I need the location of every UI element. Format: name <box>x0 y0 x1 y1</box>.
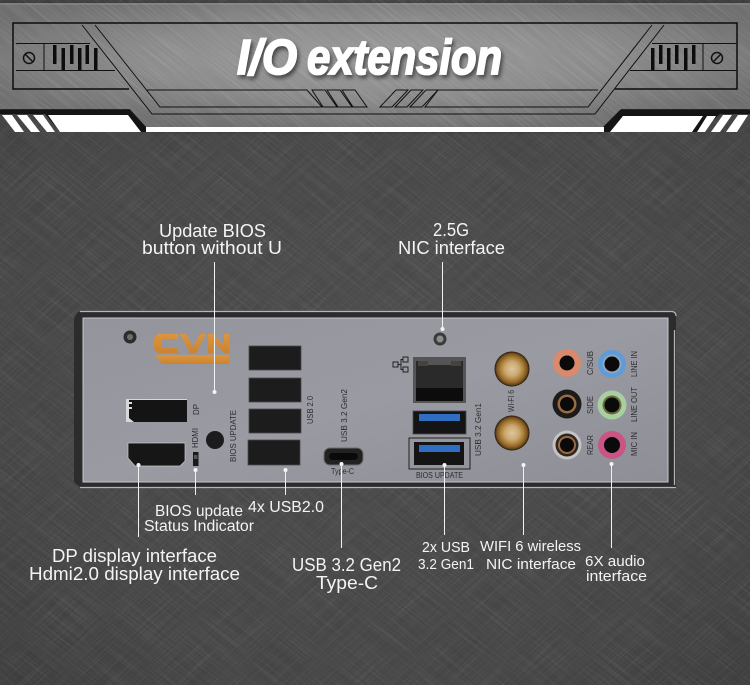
USB 3.2 ports: BIOS UPDATE <box>416 471 463 480</box>
leader lines <box>136 262 614 548</box>
label: 2.5G NIC <box>398 219 505 258</box>
engraved frame lines <box>13 23 737 114</box>
label: BIOS update status indicator: BIOS update <box>155 503 243 520</box>
label: 4x USB2.0: 4x USB2.0 <box>248 499 324 516</box>
Wi-Fi antenna connectors: WI-FI 6 <box>507 390 516 412</box>
label: update BIOS button: Update BIOS <box>159 220 266 241</box>
audio labels: LINE OUT <box>630 387 639 422</box>
header banner <box>0 3 750 132</box>
metal plate <box>0 3 750 127</box>
shield plate <box>83 318 668 482</box>
right comb widget <box>630 43 737 70</box>
label: display interfaces: DP display interface <box>52 545 217 566</box>
audio labels: C/SUB <box>586 351 595 375</box>
audio labels: LINE IN <box>630 351 639 377</box>
DP port: DP <box>192 404 201 415</box>
BIOS update button <box>206 410 238 462</box>
USB 3.2 ports: USB 3.2 Gen1 <box>474 402 483 456</box>
label: 6X audio: interface <box>586 568 647 585</box>
DP port <box>126 399 201 422</box>
left comb widget <box>16 43 115 70</box>
label: 2x USB 3.2 Gen1: 2x USB <box>422 539 470 556</box>
audio jacks <box>552 349 626 460</box>
label: update BIOS button <box>142 220 282 258</box>
USB-C port: USB 3.2 Gen2 <box>340 388 349 442</box>
white centre strip <box>146 127 604 132</box>
label: USB 3.2 Gen2 Type-C: Type-C <box>316 573 378 593</box>
network icon <box>393 357 408 372</box>
audio labels: SIDE <box>586 396 595 414</box>
white stripes right <box>610 115 748 132</box>
label: 6X audio <box>585 553 647 585</box>
label: BIOS update status indicator <box>144 503 254 535</box>
title: I/O <box>237 31 297 85</box>
title <box>237 31 502 85</box>
label: WIFI 6: NIC interface <box>486 556 576 573</box>
black band right <box>603 110 750 132</box>
CVN logo <box>154 334 229 364</box>
black band left <box>0 110 146 132</box>
label: USB 3.2 Gen2 Type-C <box>292 555 401 593</box>
label: 2x USB 3.2 Gen1: 3.2 Gen1 <box>418 556 474 573</box>
USB-C port: Type-C <box>331 467 354 476</box>
label: display interfaces <box>29 545 240 584</box>
I/O shield panel <box>74 312 676 488</box>
BIOS status LED <box>193 452 198 466</box>
label: update BIOS button: button without U <box>142 237 282 258</box>
audio labels: MIC IN <box>630 432 639 456</box>
label: 2.5G NIC: NIC interface <box>398 237 505 258</box>
USB 2.0 stack: USB 2.0 <box>306 395 315 424</box>
HDMI port <box>128 428 200 466</box>
title: extension <box>307 31 502 85</box>
audio labels <box>586 351 639 456</box>
RJ45 port <box>413 357 466 403</box>
label: USB 3.2 Gen2 Type-C: USB 3.2 Gen2 <box>292 555 401 575</box>
label: 2x USB 3.2 Gen1 <box>418 539 474 573</box>
label: 2.5G NIC: 2.5G <box>433 219 469 240</box>
white stripes left <box>2 115 141 132</box>
label: 6X audio: 6X audio <box>585 553 645 570</box>
USB-C port <box>324 388 363 476</box>
screws <box>124 330 446 346</box>
BIOS update button: BIOS UPDATE <box>229 410 238 462</box>
HDMI port: HDMI <box>191 428 200 448</box>
label: display interfaces: Hdmi2.0 display interface <box>29 563 240 584</box>
shield frame <box>74 312 676 487</box>
USB 2.0 stack <box>248 346 315 465</box>
label: BIOS update status indicator: Status Indicator <box>144 518 254 535</box>
Wi-Fi antenna connectors <box>494 352 530 450</box>
USB 3.2 ports <box>409 402 483 480</box>
label: WIFI 6 <box>480 538 581 573</box>
label: WIFI 6: WIFI 6 wireless <box>480 538 581 555</box>
audio labels: REAR <box>586 435 595 455</box>
